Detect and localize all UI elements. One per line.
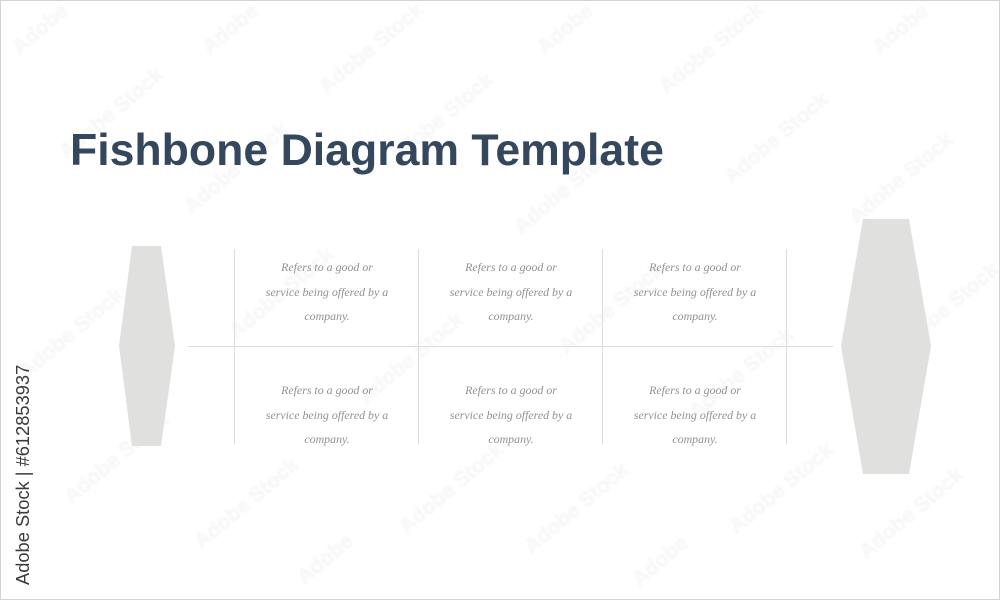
text block: bottom 3: company. [672, 432, 718, 446]
text: Adobe Stock [555, 258, 668, 358]
text block: bottom 3: service being offered by a [634, 408, 756, 422]
text block: top 2: Refers to a good or [465, 260, 557, 274]
rib line 4 [786, 249, 787, 444]
text: Adobe [533, 0, 598, 59]
text: Adobe Stock [355, 308, 468, 408]
text block: top 1: Refers to a good or [281, 260, 373, 274]
text: Adobe Stock [520, 458, 633, 558]
text block: bottom 3: Refers to a good or [649, 383, 741, 397]
text: Adobe Stock [190, 453, 303, 553]
text: Adobe Stock [15, 283, 128, 383]
text: Adobe Stock [655, 0, 768, 98]
text block: top 1 [266, 260, 388, 323]
text: Adobe Stock [685, 323, 798, 423]
icon: right hexagon head [841, 219, 931, 474]
text: Adobe [628, 531, 693, 591]
text block: bottom 1 [266, 383, 388, 446]
text block: bottom 1: service being offered by a [266, 408, 388, 422]
stock id label: Adobe Stock | #612853937 [12, 365, 33, 585]
text: Adobe Stock [315, 0, 428, 98]
text block: top 3: service being offered by a [634, 284, 756, 298]
text: Adobe Stock [725, 438, 838, 538]
rib line 1 [234, 249, 235, 444]
text block: top 1: company. [304, 309, 350, 323]
text: Adobe Stock [510, 138, 623, 238]
text block: bottom 2: company. [488, 432, 534, 446]
text block: bottom 2: Refers to a good or [465, 383, 557, 397]
text: Adobe Stock [395, 438, 508, 538]
text: Adobe Stock [55, 63, 168, 163]
text: Adobe [8, 0, 73, 59]
text block: bottom 1: company. [304, 432, 350, 446]
text block: bottom 2 [450, 383, 572, 446]
text block: top 2: company. [488, 309, 534, 323]
text: Adobe Stock [855, 463, 968, 563]
text block: top 3: Refers to a good or [649, 260, 741, 274]
text block: bottom 3 [634, 383, 756, 446]
rib line 2 [418, 249, 419, 444]
title: Fishbone Diagram Template [70, 126, 664, 175]
text block: bottom 2: service being offered by a [450, 408, 572, 422]
text block: top 2 [450, 260, 572, 323]
text: Adobe Stock [225, 243, 338, 343]
text block: top 2: service being offered by a [450, 284, 572, 298]
text block: top 3: company. [672, 309, 718, 323]
spine line [188, 346, 833, 347]
icon: left hexagon tail [119, 246, 175, 446]
rib line 3 [602, 249, 603, 444]
text block: top 3 [634, 260, 756, 323]
fishbone diagram [119, 219, 931, 474]
text: Adobe [868, 0, 933, 59]
text: Adobe [293, 529, 358, 589]
text: Adobe Stock [180, 118, 293, 218]
text: Adobe Stock [890, 258, 1000, 358]
text: Adobe Stock [60, 408, 173, 508]
text block: bottom 1: Refers to a good or [281, 383, 373, 397]
text: Adobe Stock [720, 88, 833, 188]
text: Adobe [198, 0, 263, 59]
text: Adobe Stock [385, 68, 498, 168]
text: Adobe Stock [845, 128, 958, 228]
text block: top 1: service being offered by a [266, 284, 388, 298]
